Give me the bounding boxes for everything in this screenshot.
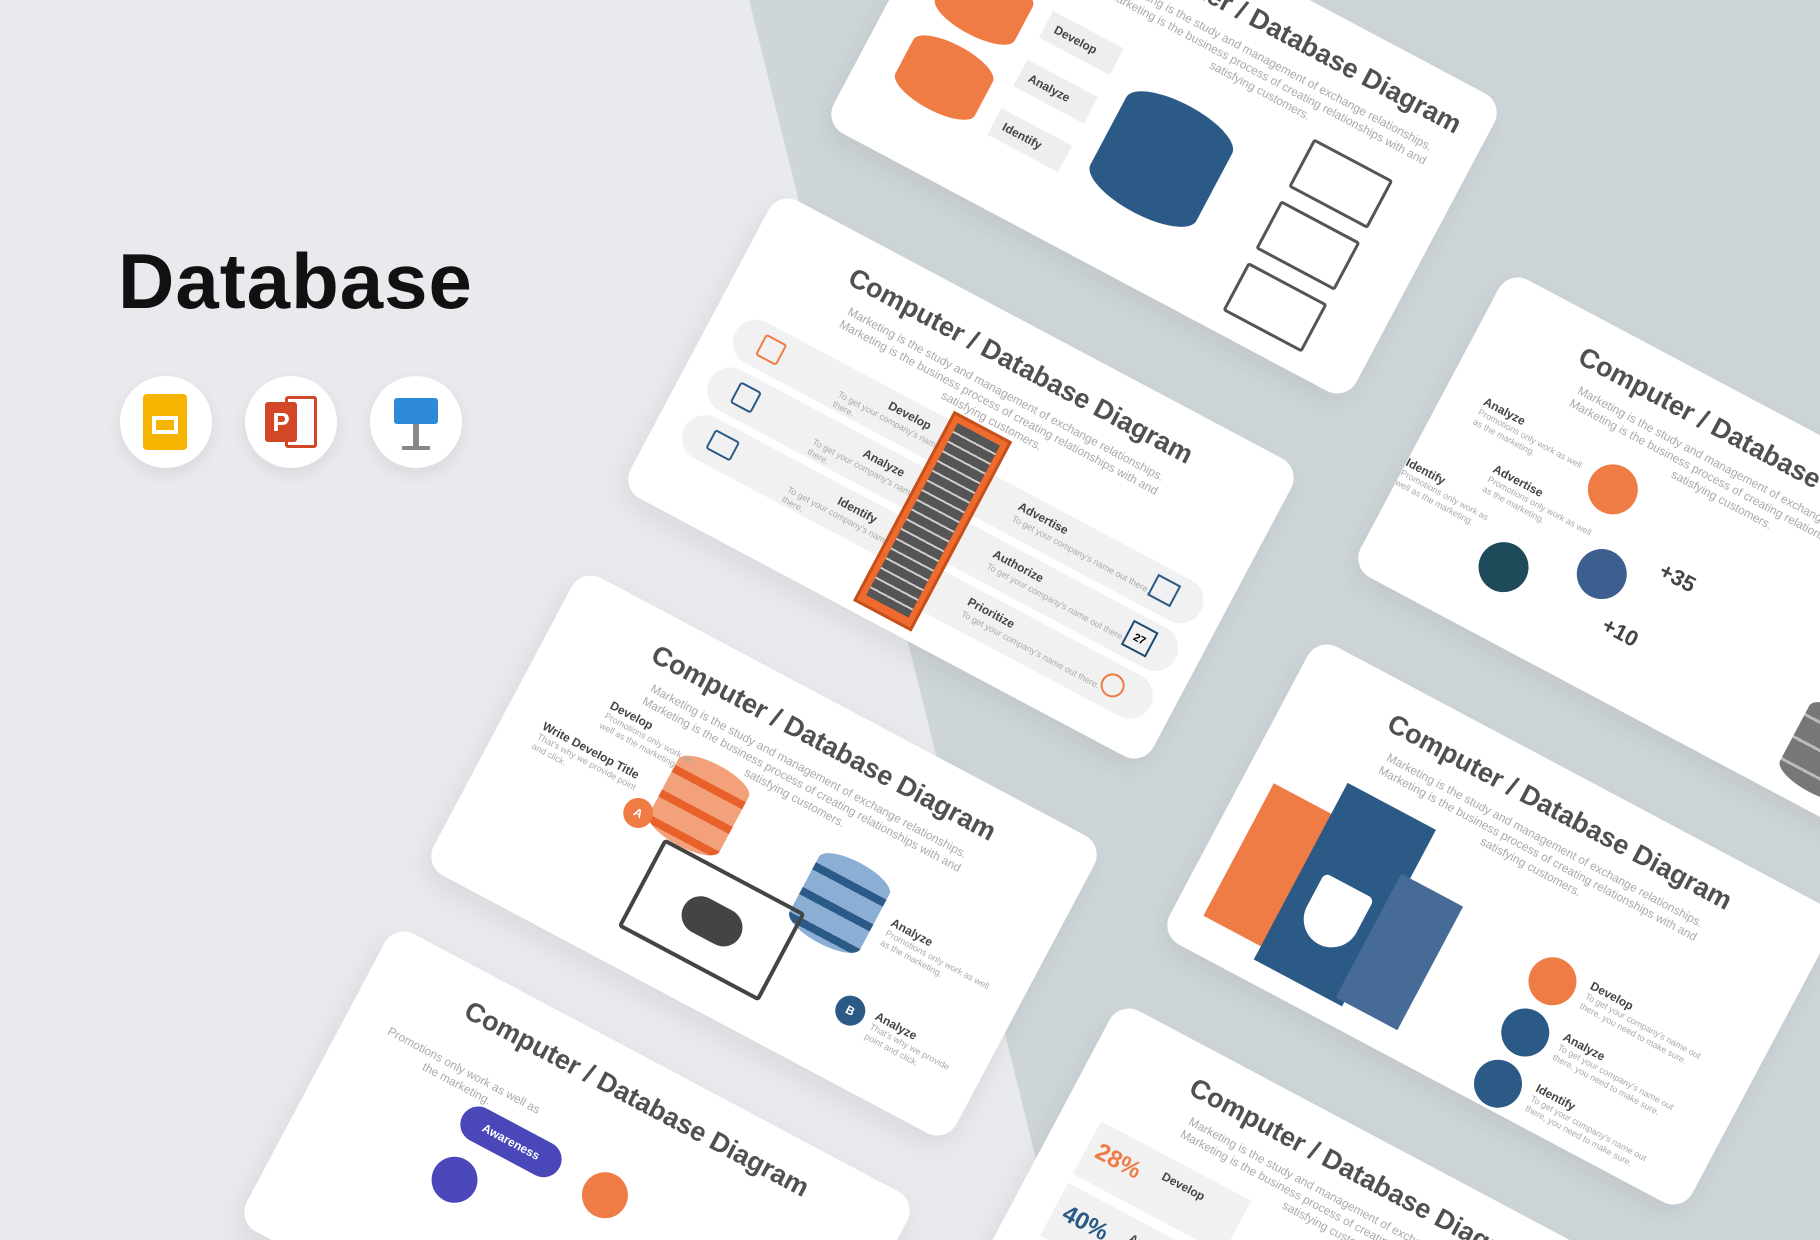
slide C: Promotions only work as well as the marketing. [598,711,694,770]
slide C: Promotions only work as well as the marketing. [879,928,991,991]
left pills: Develop [886,398,934,433]
left pills: To get your company's name out there. [831,389,955,459]
slide C [424,568,1104,1143]
icon row: app icons [120,376,462,474]
slide D: bottom left: Promotions only work as well as the marketing. [385,1024,543,1117]
percent boxes: 28% [1091,1138,1146,1185]
slide B title: Computer / Database Diagram [844,262,1198,470]
slide F: right middle: Marketing is the study and management of exchange relationships. Marketing is the business process of creating relationships with and satisfying customers. [1376,750,1705,944]
icon: powerpoint: P [272,407,290,437]
laptop with cloud [618,838,806,1002]
slide E: right top: Identify [1404,455,1448,488]
circles [1579,456,1647,523]
percent boxes [1073,1121,1251,1240]
slide D: bottom left [237,924,917,1240]
slide B: middle big: To get your company's name out there. [985,561,1127,643]
icons and labels [1520,949,1585,1014]
slide E: right top: Promotions only work as well as the marketing. [1471,407,1584,470]
blue cylinder [1080,78,1242,240]
slide A: top: Identify [1000,120,1044,152]
server rack [853,411,1012,632]
awareness pill [454,1100,568,1184]
numbers: +35 [1655,558,1700,597]
slide D title: Computer / Database Diagram [460,995,814,1203]
slide B: middle big: Prioritize [965,595,1017,631]
arrows: Develop [1052,23,1099,57]
title: Database: Database [118,237,473,325]
slide B: middle big [621,191,1301,766]
slide B: middle big: To get your company's name out there. [960,609,1101,691]
slide B: middle big: Analyze [861,446,907,480]
arrows [1039,11,1124,75]
blue db stack [783,845,896,962]
slide F: right middle: Analyze [1561,1030,1607,1064]
slide C: Marketing is the study and management of exchange relationships. Marketing is the business process of creating relationships with and satisfying customers. [640,681,969,875]
slide C: Analyze [889,916,935,949]
orange cylinders [928,0,1040,55]
right pills [952,464,1212,631]
slide E: right top: Advertise [1491,462,1546,500]
slide E: right top: Analyze [1481,394,1528,428]
slide C: B [843,1002,857,1019]
right pills: Advertise [1016,499,1071,537]
slide B: middle big: 27 [1131,631,1147,648]
slide E: right top: +10 [1598,612,1643,652]
left pills [725,312,985,479]
slide F: right middle: Develop [1588,979,1636,1013]
server towers with lock [1203,783,1336,949]
slide B: middle big: Marketing is the study and management of exchange relationships. Marketing is the business process of creating relationships with and satisfying customers. [837,304,1166,498]
icon: powerpoint [245,376,337,468]
slide E: right top [1351,270,1820,845]
slide C: Develop [608,698,655,733]
slide F: right middle: To get your company's name out there, you need to make sure. [1578,991,1703,1066]
labels: Write Develop Title [540,719,642,782]
slide F: right middle [1160,637,1820,1212]
awareness pill: Awareness [480,1121,542,1163]
orange db stack [642,747,755,864]
slide B: middle big: To get your company's name out there. [806,437,930,507]
slide B: middle big: Authorize [991,547,1046,585]
slide C: That's why we provide point and click. [863,1022,951,1072]
icon: google slides [120,376,212,468]
slide E: right top: Promotions only work as well as the marketing. [1481,474,1593,538]
percent boxes: Develop [1160,1169,1207,1204]
right pills: To get your company's name out there. [1010,513,1152,595]
slide F: right middle: To get your company's name out there, you need to make sure. [1551,1042,1675,1117]
slide C title: Computer / Database Diagram [647,639,1001,847]
slide F: right middle: To get your company's name out there, you need to make sure. [1524,1094,1648,1168]
laptops [1288,138,1393,229]
labels: That's why we provide point and click. [530,731,638,792]
slide F title: Computer / Database Diagram [1383,708,1737,916]
slide B: middle big: Identify [835,494,880,526]
slide G: bottom right [962,1001,1642,1240]
slide A: top: Analyze [1026,71,1072,105]
slide C: A [631,805,645,821]
slide C: Analyze [873,1009,919,1043]
icon: keynote [370,376,462,468]
slide F: right middle: Identify [1534,1081,1578,1114]
slide B: middle big: To get your company's name out there. [780,485,905,554]
slide E: right top: Promotions only work as well as the marketing. [1394,468,1490,527]
slide A: top [824,0,1504,401]
